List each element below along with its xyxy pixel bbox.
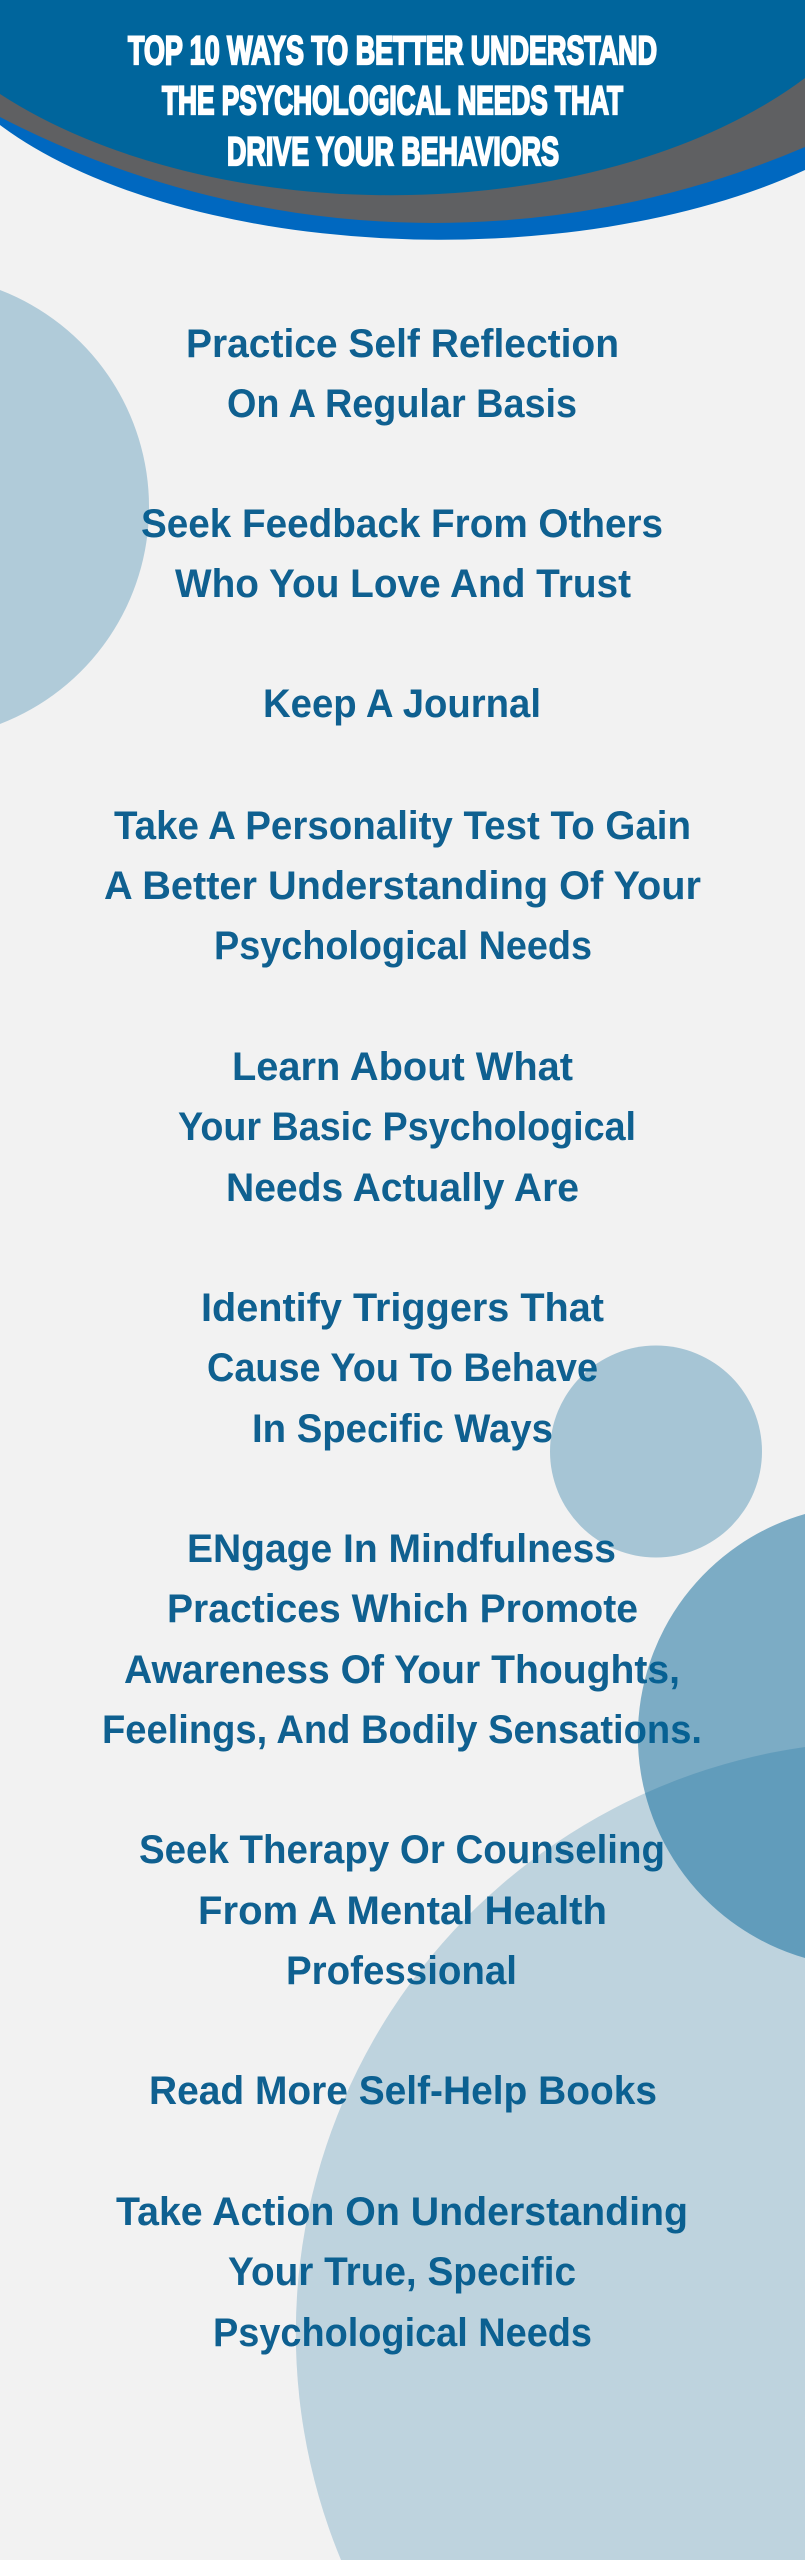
tip 5: learn basic needs: Needs Actually Are bbox=[226, 1166, 579, 1210]
tip 9: self-help books: Read More Self-Help Books bbox=[149, 2069, 657, 2113]
tip 5: learn basic needs bbox=[178, 1045, 636, 1210]
decorative circle: middle right bbox=[550, 1346, 762, 1558]
tip 2: seek feedback bbox=[141, 502, 663, 606]
tip 6: identify triggers: Identify Triggers That bbox=[201, 1286, 604, 1330]
tip 1: self reflection bbox=[186, 322, 619, 426]
tip 8: therapy bbox=[139, 1828, 665, 1993]
tip 7: mindfulness: Awareness Of Your Thoughts, bbox=[124, 1648, 680, 1692]
tip 8: therapy: Seek Therapy Or Counseling bbox=[139, 1828, 665, 1872]
tip 7: mindfulness bbox=[102, 1527, 702, 1752]
tip 10: take action: Psychological Needs bbox=[213, 2311, 592, 2355]
header banner bbox=[0, 0, 805, 240]
tip 6: identify triggers: In Specific Ways bbox=[252, 1407, 553, 1451]
decorative circle: bottom right bbox=[296, 1747, 805, 2560]
tip 8: therapy: From A Mental Health bbox=[198, 1889, 607, 1933]
tip 2: seek feedback: Seek Feedback From Others bbox=[141, 502, 663, 546]
decorative circle: left bbox=[0, 290, 149, 724]
tip 7: mindfulness: Practices Which Promote bbox=[167, 1587, 638, 1631]
tip 5: learn basic needs: Your Basic Psychological bbox=[178, 1105, 636, 1149]
title bbox=[128, 29, 657, 174]
tip 7: mindfulness: ENgage In Mindfulness bbox=[187, 1527, 616, 1571]
tip 5: learn basic needs: Learn About What bbox=[232, 1045, 573, 1089]
tip 6: identify triggers: Cause You To Behave bbox=[207, 1346, 598, 1390]
tip 6: identify triggers bbox=[201, 1286, 604, 1451]
tip 4: personality test bbox=[104, 804, 701, 968]
tip 8: therapy: Professional bbox=[286, 1949, 517, 1993]
title: DRIVE YOUR BEHAVIORS bbox=[227, 130, 559, 174]
tip 1: self reflection: On A Regular Basis bbox=[227, 382, 577, 426]
tip 3: journal: Keep A Journal bbox=[263, 682, 541, 726]
tip 4: personality test: Take A Personality Test To Gain bbox=[114, 804, 691, 848]
tip 4: personality test: Psychological Needs bbox=[214, 924, 592, 968]
tip 7: mindfulness: Feelings, And Bodily Sensations. bbox=[102, 1708, 702, 1752]
tip 10: take action: Take Action On Understanding bbox=[116, 2190, 688, 2234]
tip 2: seek feedback: Who You Love And Trust bbox=[175, 562, 631, 606]
tip 10: take action: Your True, Specific bbox=[228, 2250, 576, 2294]
tip 1: self reflection: Practice Self Reflection bbox=[186, 322, 619, 366]
decorative circle: large right bbox=[638, 1514, 805, 1958]
tip 4: personality test: A Better Understanding Of Your bbox=[104, 864, 701, 908]
tip 10: take action bbox=[116, 2190, 688, 2355]
